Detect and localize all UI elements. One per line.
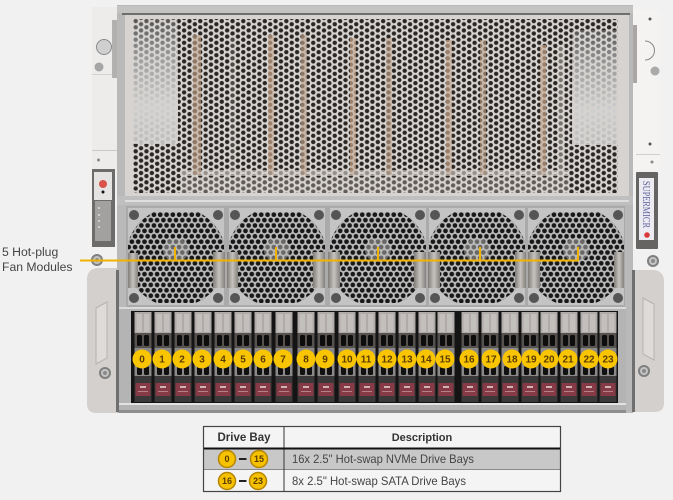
badge numbers 0 to 23: 8 — [303, 354, 309, 366]
yellow badge discs — [132, 350, 618, 368]
row 1 badges: 0 to 15: 15 — [254, 454, 264, 464]
row 2 badges: 16 to 23: 23 — [253, 476, 263, 486]
top vented panel — [125, 15, 629, 196]
callout label: fan modules: 5 Hot-plug — [2, 245, 58, 259]
badge numbers 0 to 23: 6 — [260, 354, 266, 366]
badge numbers 0 to 23: 7 — [280, 354, 286, 366]
badge numbers 0 to 23: 18 — [506, 354, 518, 366]
warm tint on the mesh over internal cards — [193, 35, 546, 175]
badge numbers 0 to 23: 23 — [602, 354, 614, 366]
badge numbers 0 to 23: 2 — [179, 354, 185, 366]
badge numbers 0 to 23: 0 — [139, 354, 145, 366]
fan module 3 — [328, 207, 428, 307]
badge numbers 0 to 23: 16 — [463, 354, 475, 366]
badge numbers 0 to 23: 22 — [583, 354, 595, 366]
fan section — [126, 206, 626, 308]
callout label: fan modules: Fan Modules — [2, 260, 72, 274]
badge numbers 0 to 23: 5 — [240, 354, 246, 366]
badge numbers 0 to 23: 13 — [401, 354, 413, 366]
right Supermicro badge: SUPERMICR — [640, 181, 651, 228]
fan handles — [128, 252, 624, 288]
left mounting ear — [92, 7, 120, 170]
perforated mesh — [133, 19, 618, 193]
rack screws — [91, 254, 659, 267]
fan module 1 — [126, 207, 226, 307]
badge numbers 0 to 23: 9 — [322, 354, 328, 366]
row 2 description: 8x 2.5" Hot-swap SATA Drive Bays — [292, 475, 466, 488]
row 1 badges: 0 to 15: 0 — [224, 454, 230, 464]
row 2 badges: 16 to 23: 16 — [222, 476, 232, 486]
badge numbers 0 to 23: 20 — [543, 354, 555, 366]
badge numbers 0 to 23: 19 — [525, 354, 537, 366]
drive bay table — [204, 426, 560, 492]
right Supermicro badge — [636, 172, 658, 249]
table header: drive bay: Drive Bay — [217, 432, 271, 444]
badge numbers 0 to 23: 4 — [220, 354, 226, 366]
badge numbers 0 to 23 — [139, 354, 614, 366]
left control panel — [92, 169, 115, 247]
table header: description: Description — [392, 432, 453, 444]
badge numbers 0 to 23: 11 — [361, 354, 372, 366]
fan module 5 — [526, 207, 626, 307]
row 1 description: 16x 2.5" Hot-swap NVMe Drive Bays — [292, 453, 474, 466]
drive bay number badges — [132, 350, 618, 368]
badge numbers 0 to 23: 17 — [485, 354, 497, 366]
drive section — [119, 307, 626, 413]
right handle — [632, 270, 664, 412]
badge numbers 0 to 23: 1 — [159, 354, 165, 366]
badge numbers 0 to 23: 10 — [341, 354, 353, 366]
left handle — [87, 268, 119, 413]
row 2 badges: 16 to 23 — [218, 472, 266, 490]
badge numbers 0 to 23: 21 — [562, 354, 574, 366]
fan module 2 — [227, 207, 327, 307]
badge numbers 0 to 23: 14 — [420, 354, 432, 366]
badge numbers 0 to 23: 15 — [439, 354, 451, 366]
badge numbers 0 to 23: 12 — [381, 354, 393, 366]
callout line: fan modules — [80, 247, 578, 260]
fan module 4 — [427, 207, 527, 307]
components behind vent — [133, 19, 618, 193]
right mounting ear — [624, 10, 660, 170]
chassis body — [117, 5, 633, 413]
row 1 badges: 0 to 15 — [218, 450, 268, 468]
badge numbers 0 to 23: 3 — [199, 354, 205, 366]
